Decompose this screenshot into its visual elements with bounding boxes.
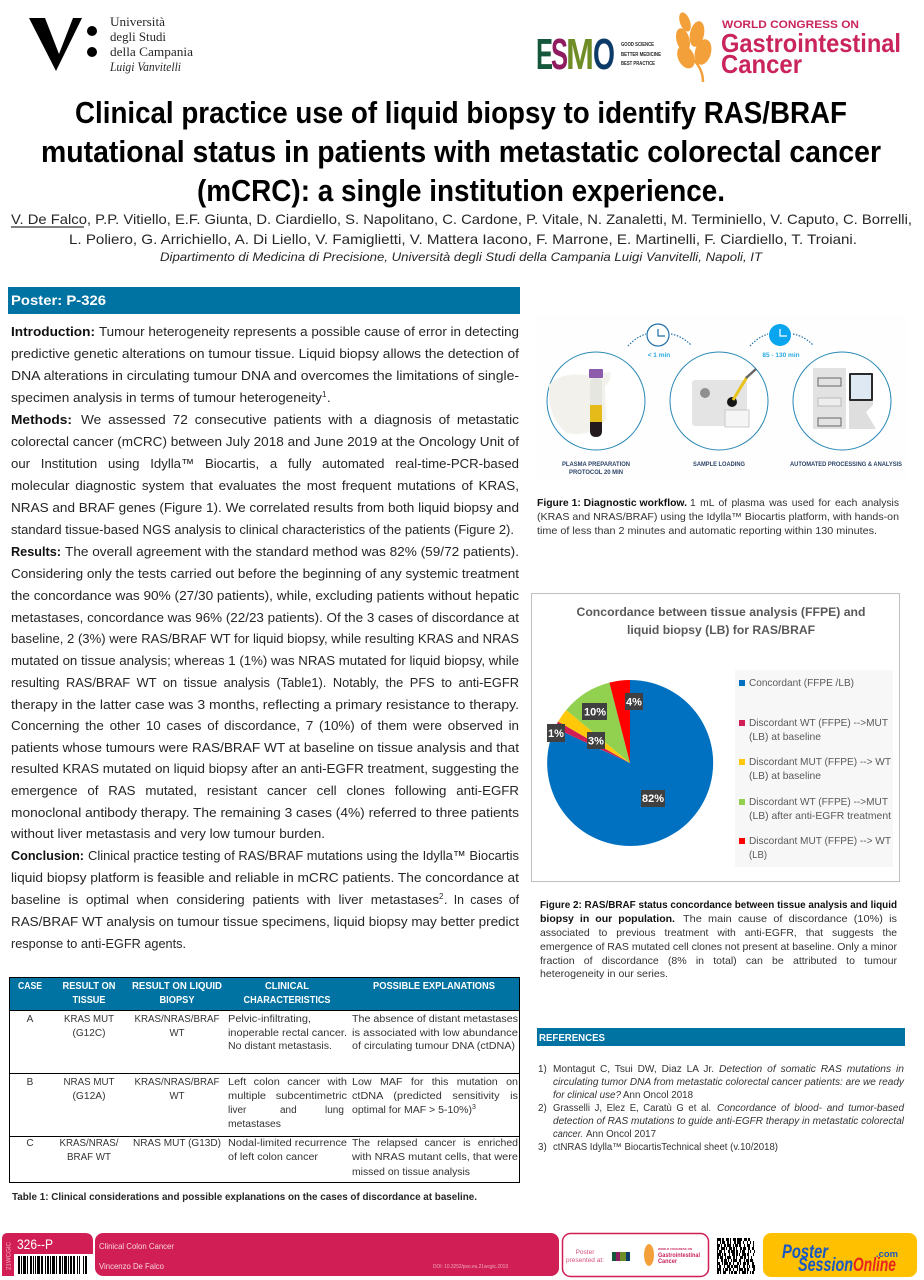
figure 1 caption: time of less than 2 minutes and automatic reporting within 130 minutes. — [537, 526, 877, 537]
text block: results: emergence of RAS mutated, resistant cancer cell clones following anti-EGFR — [11, 783, 519, 798]
heading: Poster P-326 — [8, 287, 520, 314]
table: cases of discordance: of circulating tumour DNA (ctDNA) — [352, 1041, 515, 1052]
text block: conclusion: RAS/BRAF WT analysis on tumour tissue specimens, liquid biopsy may better predict — [11, 914, 519, 929]
logo text: World Congress on Gastrointestinal Cancer: WORLD CONGRESS ON — [722, 19, 859, 31]
footer: poster topic and author: Clinical Colon Cancer — [99, 1241, 174, 1251]
pie data labels: 10% — [584, 706, 606, 718]
logo: Università della Campania Luigi Vanvitelli: della Campania — [110, 45, 193, 59]
references list: cancer. — [553, 1129, 583, 1140]
table: cases of discordance: optimal for MAF > 5-10%) — [352, 1105, 472, 1116]
text block: conclusion: Clinical practice testing of RAS/BRAF mutations using the Idylla™ Biocartis — [88, 848, 519, 863]
table: cases of discordance: lung — [325, 1105, 344, 1116]
table: cases of discordance: multiple subcentimetric — [228, 1091, 347, 1102]
references list: Ann Oncol 2018 — [623, 1090, 694, 1101]
text block: methods: Methods: — [11, 412, 72, 427]
text block: introduction: predictive genetic alterations on tumour tissue. Liquid biopsy allows the detection of — [11, 346, 519, 361]
chart legend: (LB) after anti-EGFR treatment — [749, 811, 891, 822]
table: cases of discordance: BRAF WT — [67, 1152, 111, 1163]
table: cases of discordance: KRAS/NRAS/BRAF — [134, 1014, 220, 1025]
table: cases of discordance: Low MAF for this mutation on — [352, 1077, 518, 1088]
chart legend: Discordant MUT (FFPE) --> WT — [749, 757, 891, 768]
heading: references: REFERENCES — [539, 1032, 605, 1044]
text block: results: Concerning the other 10 cases of discordance, 7 (10%) of them were observed in — [11, 718, 519, 733]
logo: ESMO: M — [566, 30, 594, 79]
table: cases of discordance: and — [280, 1105, 297, 1116]
references list: 3) — [538, 1142, 547, 1153]
text block: methods: our Institution using Idylla™ Biocartis, a fully automated real-time-PCR-based — [11, 456, 519, 471]
text block: results: mutated on tissue analysis; whereas 1 (1%) was NRAS mutated for liquid biopsy, while — [11, 653, 519, 668]
table: cases of discordance: KRAS/NRAS/BRAF — [134, 1077, 220, 1088]
figure 1 caption: 1 mL of plasma was used for each analysis — [690, 498, 899, 509]
footer: PosterSessionOnline logo — [763, 1233, 917, 1277]
text block: results — [10, 544, 520, 841]
footer: QR code — [717, 1240, 755, 1272]
table: cases of discordance: Nodal-limited recurrence — [228, 1138, 347, 1149]
authors: V. De Falco, P.P. Vitiello, E.F. Giunta, D. Ciardiello, S. Napolitano, C. Cardone, P. Vitale, N. Zanaletti, M. Terminiello, V. Caputo, C. Borrelli, — [11, 211, 912, 227]
pie data labels — [547, 693, 665, 807]
logo: Università della Campania Luigi Vanvitelli: Università — [110, 15, 165, 29]
references list: circulating tumor DNA from metastatic colorectal cancer patients: are we ready — [553, 1077, 905, 1088]
text block: results: the concordance was 90% (27/30 patients), while, excluding patients without hepatic — [11, 588, 520, 603]
workflow labels: SAMPLE LOADING — [693, 461, 745, 468]
text block: results: baseline, 2 (3%) were RAS/BRAF WT for liquid biopsy, while resulting KRAS and NRAS — [11, 631, 519, 646]
table caption: Table 1: Clinical considerations and possible explanations on the cases of discordance at baseline. — [12, 1192, 477, 1203]
icon: timer 85-130 minutes — [750, 324, 813, 359]
references list: detection of RAS mutations to guide anti-EGFR therapy in metastatic colorectal — [553, 1116, 905, 1127]
footer: poster presented at: Poster — [576, 1249, 595, 1256]
footer: PosterSessionOnline logo: Poster — [782, 1242, 829, 1263]
title: Clinical practice use of liquid biopsy to identify RAS/BRAF — [75, 95, 847, 130]
text block: results: Considering only the tests carried out before the beginning of any systemic treatment — [11, 566, 519, 581]
logo: ESMO — [536, 30, 662, 79]
footer: poster id and barcode — [2, 1233, 93, 1276]
chart title: Concordance between tissue analysis (FFPE) and — [576, 605, 866, 619]
pie chart — [547, 680, 713, 846]
workflow labels: AUTOMATED PROCESSING & ANALYSIS — [790, 461, 902, 468]
figure 2 caption: biopsy in our population. — [540, 914, 675, 925]
figure 2 caption: The main cause of discordance (10%) is — [683, 914, 897, 925]
table: cases of discordance: is associated with low abundance — [352, 1028, 518, 1039]
footer: poster id and barcode: 21WCGIC — [6, 1241, 12, 1270]
footer: poster presented at: Gastrointestinal — [658, 1253, 700, 1259]
pie data labels: 3% — [588, 736, 604, 748]
table: cases of discordance: BIOPSY — [160, 995, 195, 1006]
footer: PosterSessionOnline logo: .com — [876, 1249, 898, 1259]
footer: poster topic and author: Vincenzo De Falco — [99, 1261, 164, 1271]
footer: poster presented at: presented at: — [566, 1257, 604, 1264]
table: cases of discordance: A — [27, 1014, 34, 1025]
authors: L. Poliero, G. Arrichiello, A. Di Liello, V. Famiglietti, V. Mattera Iacono, F. Marrone, E. Martinelli, F. Ciardiello, T. Troiani. — [69, 231, 857, 247]
chart title: liquid biopsy (LB) for RAS/BRAF — [627, 623, 815, 637]
references list: Montagut C, Tsui DW, Diaz LA Jr. — [553, 1064, 714, 1075]
text block: conclusion: Conclusion: — [11, 848, 84, 863]
text block: results: The overall agreement with the standard method was 82% (59/72 patients). — [65, 544, 519, 559]
workflow labels: PLASMA PREPARATION — [562, 461, 630, 468]
references list: for clinical use? — [553, 1090, 622, 1101]
table: cases of discordance: CASE — [18, 981, 42, 992]
figure 1 caption: (KRAS and NRAS/BRAF) using the Idylla™ Biocartis platform, with hands-on — [537, 512, 899, 523]
chart legend: (LB) at baseline — [749, 732, 821, 743]
table: cases of discordance: POSSIBLE EXPLANATIONS — [373, 981, 495, 992]
table: cases of discordance: TISSUE — [72, 995, 106, 1006]
logo text: World Congress on Gastrointestinal Cancer: Gastrointestinal — [721, 28, 901, 58]
text block: methods: standard tissue-based NGS analysis to clinical characteristics of the patients (Figure 2). — [11, 522, 514, 537]
chart legend: (LB) — [749, 850, 767, 861]
chart legend — [735, 670, 893, 867]
icon: timer under one minute: < 1 min — [648, 352, 670, 359]
table: cases of discordance: C — [26, 1138, 34, 1149]
table: cases of discordance: No distant metastasis. — [228, 1041, 332, 1052]
table: cases of discordance: metastases — [228, 1119, 281, 1130]
authors — [11, 211, 912, 247]
icon: Idylla instrument and console — [793, 352, 891, 450]
pie data labels: 4% — [626, 696, 642, 708]
footer: poster presented at: WORLD CONGRESS ON — [658, 1247, 692, 1251]
logo text: World Congress on Gastrointestinal Cancer: Cancer — [721, 49, 802, 79]
figure 2 caption: Figure 2: RAS/BRAF status concordance between tissue analysis and liquid — [540, 900, 897, 911]
icon: wheat ear — [674, 11, 714, 82]
table: cases of discordance — [9, 977, 520, 1182]
table: cases of discordance: CHARACTERISTICS — [244, 995, 331, 1006]
table: cases of discordance: KRAS MUT — [64, 1014, 114, 1025]
icon: blood tube in gloved hand — [547, 352, 645, 450]
figure 2 caption: associated to previous treatment with anti-EGFR, that suggests the — [540, 928, 897, 939]
title: (mCRC): a single institution experience. — [197, 173, 725, 208]
text block: methods — [11, 412, 520, 537]
logo: ESMO: O — [593, 30, 615, 79]
text block: results: resulted KRAS mutated on liquid biopsy after an anti-EGFR treatment, suggesting the — [11, 761, 519, 776]
chart panel: concordance pie — [532, 594, 900, 882]
chart title — [576, 605, 866, 637]
footer: poster topic and author: DOI: 10.3252/pso.eu.21wcgic.2019 — [433, 1264, 508, 1270]
text block: results: patients whose tumours were RAS/BRAF WT at baseline on tissue analysis and that — [11, 740, 519, 755]
chart legend: Discordant MUT (FFPE) --> WT — [749, 836, 891, 847]
footer: poster topic and author — [95, 1233, 559, 1276]
text block: conclusion: . In cases of — [444, 892, 519, 907]
logo: ESMO: S — [551, 30, 568, 79]
table: cases of discordance: WT — [170, 1028, 184, 1039]
chart legend: (LB) at baseline — [749, 771, 821, 782]
footer: poster presented at: Cancer — [658, 1259, 678, 1265]
logo: Università della Campania Luigi Vanvitelli: Luigi Vanvitelli — [109, 60, 181, 74]
heading: Poster P-326: Poster: P-326 — [11, 292, 106, 308]
table: cases of discordance: inoperable rectal cancer. — [228, 1028, 347, 1039]
icon: sample cartridge — [670, 352, 768, 450]
text block: methods: molecular diagnostic system that evaluates the most frequent mutations of KRAS, — [11, 478, 519, 493]
chart legend: Discordant WT (FFPE) -->MUT — [749, 718, 888, 729]
text block: methods: We assessed 72 consecutive patients with a diagnosis of metastatic — [81, 412, 520, 427]
table: cases of discordance: of left colon cancer — [228, 1152, 319, 1163]
text block: conclusion: response to anti-EGFR agents. — [11, 936, 186, 951]
table: cases of discordance: Left colon cancer with — [228, 1077, 347, 1088]
text block: results: resulting RAS/BRAF WT on tissue analysis (Table1). Notably, the PFS to anti-EGFR — [11, 675, 519, 690]
table: cases of discordance: with NRAS mutant cells, that were — [351, 1152, 518, 1163]
references list — [538, 1064, 905, 1153]
table: cases of discordance: 3 — [472, 1104, 476, 1111]
title — [41, 95, 881, 208]
text block: introduction: 1 — [322, 390, 327, 399]
references list: 2) — [538, 1103, 547, 1114]
logo text: World Congress on Gastrointestinal Cancer — [721, 19, 901, 79]
table: cases of discordance: KRAS/NRAS/ — [60, 1138, 119, 1149]
text block: results: metastases, concordance was 96% (22/23 patients). Of the 3 cases of discordance at — [11, 610, 519, 625]
table: cases of discordance: Pelvic-infiltrating, — [228, 1014, 311, 1025]
heading: references — [537, 1028, 905, 1046]
text block: introduction — [11, 324, 519, 405]
references list: Concordance of blood- and tumor-based — [717, 1103, 905, 1114]
table: cases of discordance: B — [27, 1077, 34, 1088]
pie data labels: 82% — [642, 793, 664, 805]
figure 2 caption: fraction of discordance (8% in total) can be attributed to tumour — [540, 956, 898, 967]
logo: ESMO: E — [536, 30, 553, 79]
text block: results: without liver metastasis and very low tumour burden. — [10, 826, 325, 841]
table: cases of discordance: CLINICAL — [265, 981, 309, 992]
footer: PosterSessionOnline logo: Online — [853, 1255, 896, 1276]
table: cases of discordance: RESULT ON — [62, 981, 116, 992]
text block: conclusion: baseline is optimal when considering patients with liver metastases — [11, 892, 440, 907]
logo: Università della Campania Luigi Vanvitelli: degli Studi — [110, 30, 167, 44]
figure 1 caption — [537, 498, 899, 537]
table: cases of discordance: NRAS MUT — [64, 1077, 114, 1088]
table: cases of discordance: ctDNA (predicted sensitivity is — [352, 1091, 518, 1102]
text block: results: therapy in the latter case was 3 months, reflecting a primary resistance to therapy. — [11, 697, 519, 712]
footer: poster id and barcode: 326--P — [17, 1236, 53, 1252]
figure 1 caption: Figure 1: Diagnostic workflow. — [537, 498, 687, 509]
text block: results: monoclonal antibody therapy. The remaining 3 cases (4%) referred to three patients — [11, 805, 520, 820]
text block: introduction: Introduction: — [11, 324, 95, 339]
figure 2 caption — [540, 900, 898, 980]
figure 2 caption: emergence of RAS mutated cell clones not present at baseline. Only a minor — [540, 942, 898, 953]
workflow labels: PROTOCOL 20 MIN — [569, 469, 624, 476]
pie data labels: 1% — [548, 728, 564, 740]
references list: Detection of somatic RAS mutations in — [719, 1064, 904, 1075]
logo: ESMO: BETTER MEDICINE — [621, 52, 662, 58]
footer: poster presented at — [562, 1234, 708, 1276]
text block: introduction: specimen analysis in terms of tumour heterogeneity — [11, 390, 323, 405]
logo: ESMO: GOOD SCIENCE — [621, 42, 655, 48]
figure 2 caption: heterogeneity in our series. — [540, 969, 668, 980]
text block: conclusion: liquid biopsy platform is feasible and reliable in mCRC patients. The concordance at — [11, 870, 519, 885]
references list: ctNRAS Idylla™ BiocartisTechnical sheet (v.10/2018) — [553, 1142, 778, 1153]
barcode — [18, 1256, 89, 1274]
references list: Ann Oncol 2017 — [586, 1129, 656, 1140]
table: cases of discordance: (G12A) — [72, 1091, 106, 1102]
text block: methods: colorectal cancer (mCRC) between July 2018 and June 2019 at the Oncology Unit of — [11, 434, 519, 449]
table: cases of discordance: WT — [170, 1091, 184, 1102]
references list: 1) — [538, 1064, 547, 1075]
table: cases of discordance: RESULT ON LIQUID — [132, 981, 222, 992]
text block: results: Results: — [11, 544, 61, 559]
text block: introduction: . — [327, 390, 331, 405]
icon: timer 85-130 minutes: 85 - 130 min — [762, 352, 800, 359]
text block: conclusion: 2 — [439, 892, 444, 901]
chart legend: Discordant WT (FFPE) -->MUT — [749, 797, 888, 808]
text block: methods: NRAS and BRAF genes (Figure 1). We correlated results from both liquid biopsy and — [11, 500, 519, 515]
table: cases of discordance: missed on tissue analysis — [352, 1167, 470, 1178]
table: cases of discordance: liver — [228, 1105, 247, 1116]
text block: conclusion — [11, 848, 519, 951]
affiliation: Dipartimento di Medicina di Precisione, Università degli Studi della Campania Luigi Vanvitelli, Napoli, IT — [160, 250, 764, 264]
logo: Università della Campania Luigi Vanvitelli — [29, 15, 193, 74]
figure 1: diagnostic workflow — [535, 315, 906, 480]
table: cases of discordance: (G12C) — [72, 1028, 106, 1039]
text block: introduction: DNA alterations in circulating tumour DNA and overcomes the limitations of single- — [11, 368, 519, 383]
references list: Grasselli J, Elez E, Caratù G et al. — [553, 1103, 711, 1114]
chart legend: Concordant (FFPE /LB) — [749, 678, 854, 689]
table: cases of discordance: NRAS MUT (G13D) — [133, 1138, 221, 1149]
footer: PosterSessionOnline logo: Session — [798, 1255, 853, 1276]
logo: ESMO: BEST PRACTICE — [621, 61, 656, 67]
icon: timer under one minute — [628, 324, 691, 359]
table: cases of discordance: The relapsed cancer is enriched — [352, 1138, 518, 1149]
text block: introduction: Tumour heterogeneity represents a possible cause of error in detecting — [99, 324, 519, 339]
table: cases of discordance: The absence of distant metastases — [352, 1014, 518, 1025]
workflow labels — [562, 461, 902, 476]
